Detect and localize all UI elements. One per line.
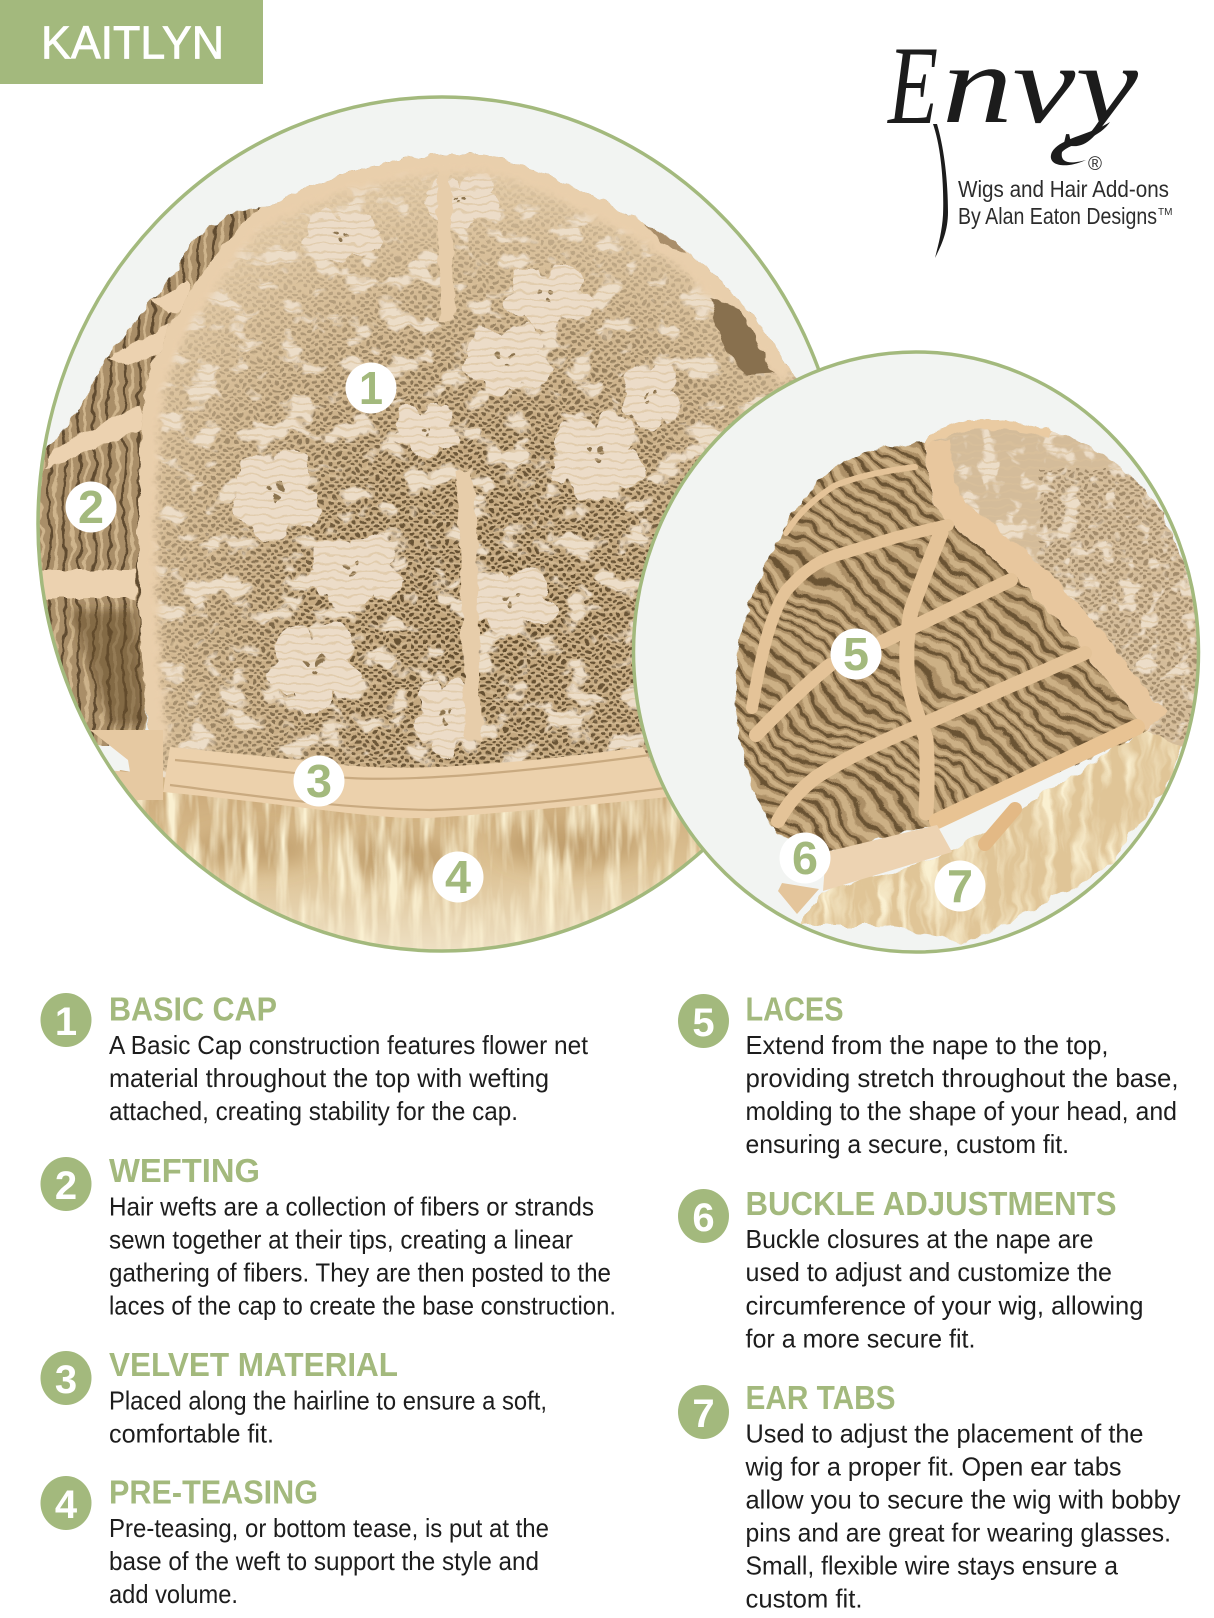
body text: pins and are great for wearing glasses. xyxy=(746,1518,1171,1548)
photo panel: front of cap xyxy=(20,97,860,960)
badge 6: 6 xyxy=(692,1196,715,1240)
cap dome xyxy=(136,152,797,778)
heading: PRE-TEASING xyxy=(109,1474,318,1510)
badge 6 xyxy=(678,1189,729,1243)
body text: A Basic Cap construction features flower net xyxy=(109,1030,589,1060)
callout 7: 7 xyxy=(947,860,973,912)
title banner: KAITLYN xyxy=(41,16,224,68)
body text xyxy=(109,1030,589,1126)
heading: LACES xyxy=(746,990,844,1028)
photo panel: nape of cap xyxy=(634,352,1210,952)
mesh holes xyxy=(140,152,796,770)
dark lower weft shadow xyxy=(70,610,145,725)
heading: BUCKLE ADJUSTMENTS xyxy=(746,1185,1116,1222)
logo: Envy: nvy xyxy=(942,23,1138,147)
item 3: velvet material xyxy=(40,1346,547,1448)
body text: circumference of your wig, allowing xyxy=(746,1290,1144,1320)
logo: Envy: TM xyxy=(1158,207,1172,218)
badge 3: 3 xyxy=(55,1358,77,1402)
body text: allow you to secure the wig with bobby xyxy=(746,1484,1180,1514)
lightening toward crown and edges xyxy=(137,152,796,778)
callout 2: 2 xyxy=(78,481,104,533)
buckle strap xyxy=(823,825,952,891)
body text: ensuring a secure, custom fit. xyxy=(746,1129,1069,1159)
callout 6 xyxy=(780,832,830,884)
lace patches xyxy=(925,428,1196,742)
right weft window xyxy=(710,297,773,375)
body text xyxy=(109,1386,547,1448)
badge 5: 5 xyxy=(692,1001,715,1045)
item 4: pre-teasing xyxy=(40,1474,549,1609)
body text: material throughout the top with wefting xyxy=(109,1063,549,1093)
strap end xyxy=(778,883,819,914)
body text: Placed along the hairline to ensure a soft, xyxy=(109,1386,547,1416)
blond hair xyxy=(120,770,701,950)
callout 1 xyxy=(346,362,396,414)
body text: Small, flexible wire stays ensure a xyxy=(746,1550,1119,1580)
callout 5 xyxy=(830,628,882,680)
item 2: wefting xyxy=(40,1152,616,1320)
body text xyxy=(746,1030,1178,1159)
peach lace border xyxy=(923,443,1148,731)
badge 7 xyxy=(678,1385,729,1439)
badge 1 xyxy=(40,993,92,1047)
body text: wig for a proper fit. Open ear tabs xyxy=(745,1452,1122,1482)
body text: comfortable fit. xyxy=(109,1418,274,1448)
heading: BASIC CAP xyxy=(109,990,277,1028)
badge 3 xyxy=(40,1351,92,1405)
side laces xyxy=(36,280,195,598)
item 6: buckle adjustments xyxy=(678,1185,1144,1354)
callout 7 xyxy=(934,860,986,912)
body text: gathering of fibers. They are then posted to the xyxy=(109,1258,611,1288)
heading: EAR TABS xyxy=(746,1379,896,1416)
body text xyxy=(745,1418,1180,1614)
badge 7: 7 xyxy=(692,1392,715,1436)
body text: sewn together at their tips, creating a linear xyxy=(109,1224,573,1254)
item 5: laces xyxy=(678,990,1178,1159)
badge 4 xyxy=(40,1476,92,1530)
badge 2 xyxy=(40,1157,92,1211)
body text: base of the weft to support the style and xyxy=(109,1546,539,1576)
body text: custom fit. xyxy=(746,1584,862,1614)
callout 2 xyxy=(66,481,116,533)
velvet band xyxy=(163,747,668,818)
body text xyxy=(746,1224,1144,1354)
body text: for a more secure fit. xyxy=(746,1324,976,1354)
callout 3: 3 xyxy=(306,755,332,807)
ear tab xyxy=(90,730,163,800)
badge 4: 4 xyxy=(55,1483,78,1527)
logo: Envy xyxy=(887,23,1172,258)
body text: used to adjust and customize the xyxy=(746,1257,1112,1287)
lace mesh xyxy=(1040,470,1210,740)
body text: Extend from the nape to the top, xyxy=(746,1030,1108,1060)
logo: Envy: Wigs and Hair Add-ons xyxy=(958,176,1169,202)
heading: VELVET MATERIAL xyxy=(109,1346,398,1383)
left wefts xyxy=(20,208,263,745)
peach cap edge xyxy=(139,154,793,745)
body text xyxy=(109,1513,549,1609)
body text: add volume. xyxy=(109,1579,238,1609)
callout 3 xyxy=(294,755,344,807)
logo: Envy: By Alan Eaton Designs xyxy=(958,203,1157,229)
hair tufts xyxy=(190,823,640,882)
item 7: ear tabs xyxy=(678,1379,1180,1614)
irregular lace patches xyxy=(137,154,793,778)
title banner xyxy=(0,0,263,84)
body text: Used to adjust the placement of the xyxy=(746,1418,1144,1448)
body text: Hair wefts are a collection of fibers or strands xyxy=(109,1192,594,1222)
logo: Envy: ® xyxy=(1088,154,1102,175)
center seam xyxy=(463,470,474,740)
blond hair xyxy=(800,730,1182,945)
body text: Pre-teasing, or bottom tease, is put at the xyxy=(109,1513,549,1543)
item 1: basic cap xyxy=(40,990,589,1126)
badge 5 xyxy=(678,994,729,1048)
lace crown xyxy=(924,419,1197,746)
flower lace xyxy=(234,175,680,757)
callout 4: 4 xyxy=(445,851,471,903)
logo: Envy: E xyxy=(887,24,938,148)
callout 6: 6 xyxy=(792,832,818,884)
callout 1: 1 xyxy=(359,362,383,414)
badge 1: 1 xyxy=(55,1000,77,1044)
laces xyxy=(752,467,1137,844)
body text: providing stretch throughout the base, xyxy=(746,1063,1178,1093)
body text: laces of the cap to create the base construction. xyxy=(109,1290,616,1320)
wefting xyxy=(734,441,1147,851)
heading: WEFTING xyxy=(109,1152,260,1189)
body text: Buckle closures at the nape are xyxy=(746,1224,1094,1254)
body text xyxy=(109,1192,616,1320)
weft threads xyxy=(156,173,792,772)
badge 2: 2 xyxy=(55,1164,77,1208)
body text: molding to the shape of your head, and xyxy=(746,1096,1177,1126)
callout 5: 5 xyxy=(843,628,869,680)
callout 4 xyxy=(432,851,484,903)
body text: attached, creating stability for the cap. xyxy=(109,1096,518,1126)
